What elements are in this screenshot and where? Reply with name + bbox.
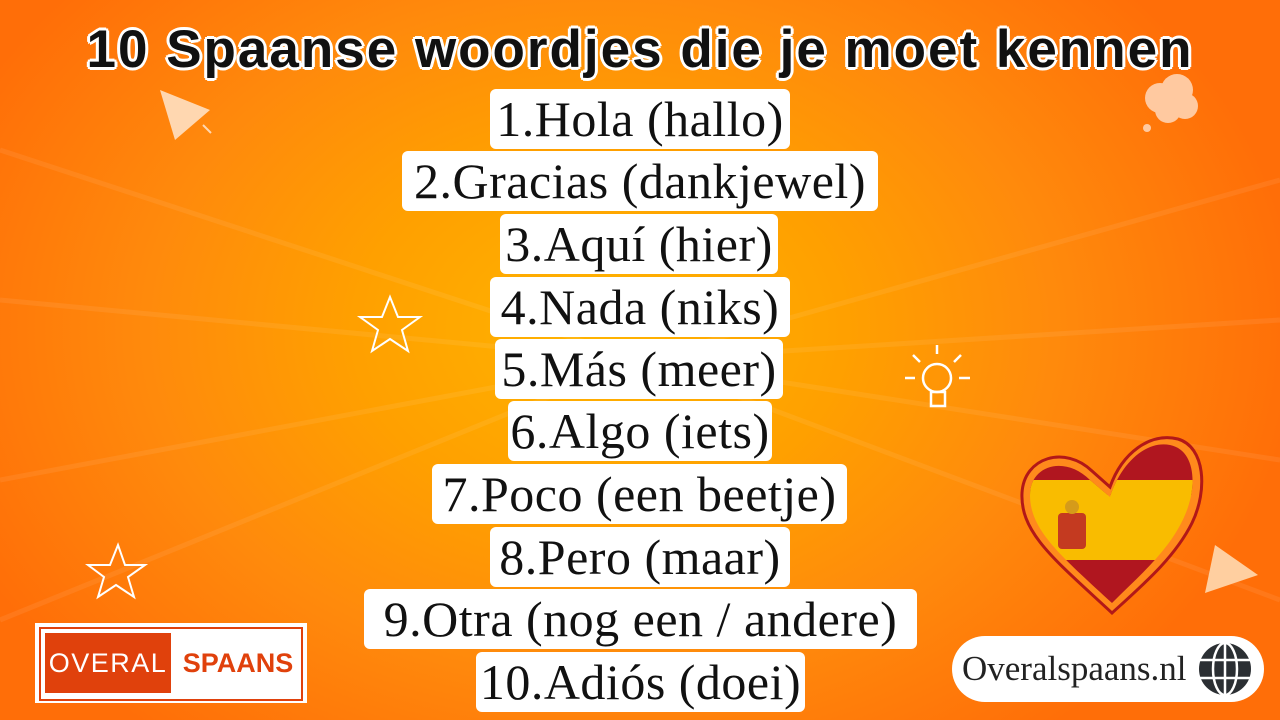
logo: Overal Spaans: SPAANS <box>183 648 293 678</box>
item 10: 10.Adiós (doei) <box>480 654 801 710</box>
icon: star bottom-left <box>85 542 148 600</box>
title: 10 Spaanse woordjes die je moet kennen <box>87 20 1193 79</box>
item 2: 2.Gracias (dankjewel) <box>414 153 866 209</box>
icon: light bulb <box>905 345 970 408</box>
icon: paper plane top-left <box>160 90 212 140</box>
item 1: 1.Hola (hallo) <box>496 91 784 147</box>
icon: thought cloud <box>1143 74 1198 132</box>
icon: globe <box>1199 643 1251 695</box>
item 8: 8.Pero (maar) <box>499 529 781 585</box>
item 9: 9.Otra (nog een / andere) <box>384 591 897 647</box>
icon: paper plane bottom-right <box>1205 545 1258 593</box>
item 3: 3.Aquí (hier) <box>505 216 773 272</box>
website badge: Overalspaans.nl <box>962 649 1187 688</box>
item 7: 7.Poco (een beetje) <box>442 466 837 522</box>
item 6: 6.Algo (iets) <box>510 403 770 459</box>
icon: heart with Spanish flag <box>1020 436 1204 615</box>
item 4: 4.Nada (niks) <box>501 279 779 335</box>
icon: star middle-left <box>357 294 423 354</box>
logo: Overal Spaans <box>35 623 307 703</box>
logo: Overal Spaans: OVERAL <box>49 648 167 678</box>
website badge <box>952 636 1264 702</box>
item 5: 5.Más (meer) <box>501 341 777 397</box>
